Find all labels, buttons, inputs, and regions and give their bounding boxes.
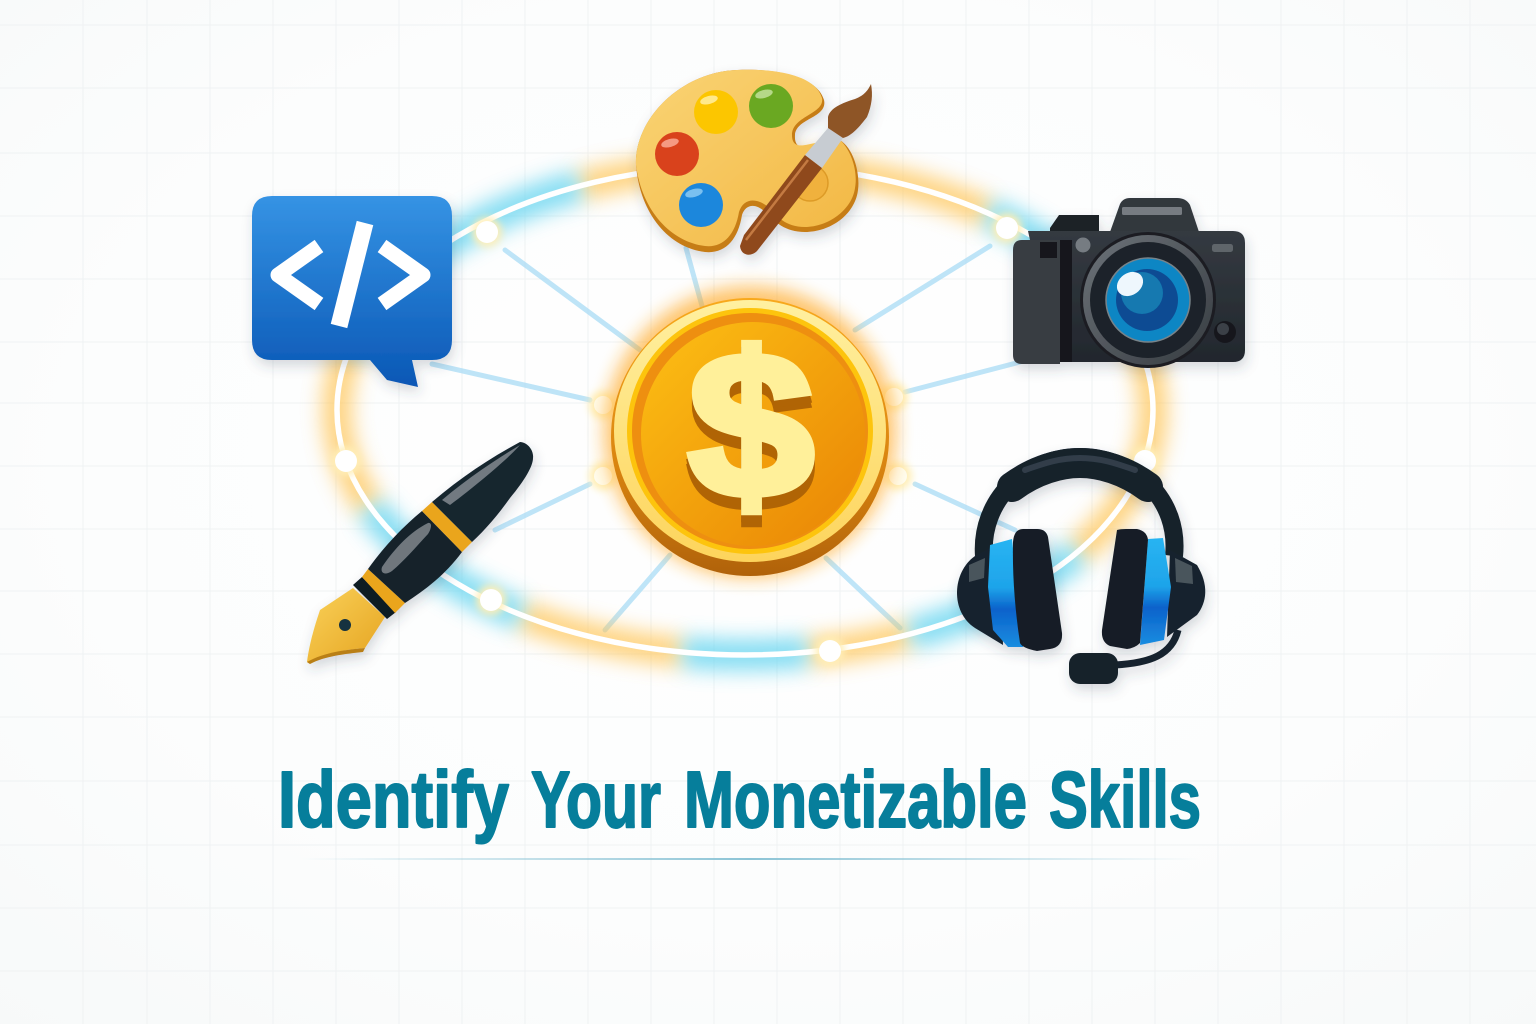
title underline xyxy=(300,858,1200,860)
title: Monetizable xyxy=(684,755,1027,844)
title: Identify xyxy=(278,755,509,844)
icon: camera xyxy=(1013,198,1245,368)
barrel xyxy=(368,511,462,603)
paint wells xyxy=(655,132,699,176)
icon: fountain pen xyxy=(307,442,533,664)
nib xyxy=(307,588,385,664)
code symbol xyxy=(278,223,423,326)
icon: dollar coin xyxy=(604,286,896,578)
cap xyxy=(432,442,533,542)
icon: code speech bubble xyxy=(252,196,452,387)
icon: paint palette xyxy=(636,70,872,255)
title: Skills xyxy=(1049,755,1201,844)
connector rays xyxy=(432,246,1020,630)
grip ring xyxy=(353,577,396,619)
left ear cup xyxy=(957,529,1062,651)
icon: headset xyxy=(957,457,1205,684)
microphone boom xyxy=(1069,630,1178,684)
dollar sign: $ xyxy=(688,310,814,540)
title xyxy=(278,755,1201,844)
right ear cup xyxy=(1102,529,1205,649)
lens xyxy=(1080,232,1216,368)
ring nodes xyxy=(331,213,1160,666)
title: Your xyxy=(531,755,661,844)
paint brush xyxy=(740,84,872,255)
orbit ring xyxy=(337,165,1153,655)
dollar sign: $ xyxy=(688,322,814,552)
dollar sign: $ xyxy=(688,317,814,547)
